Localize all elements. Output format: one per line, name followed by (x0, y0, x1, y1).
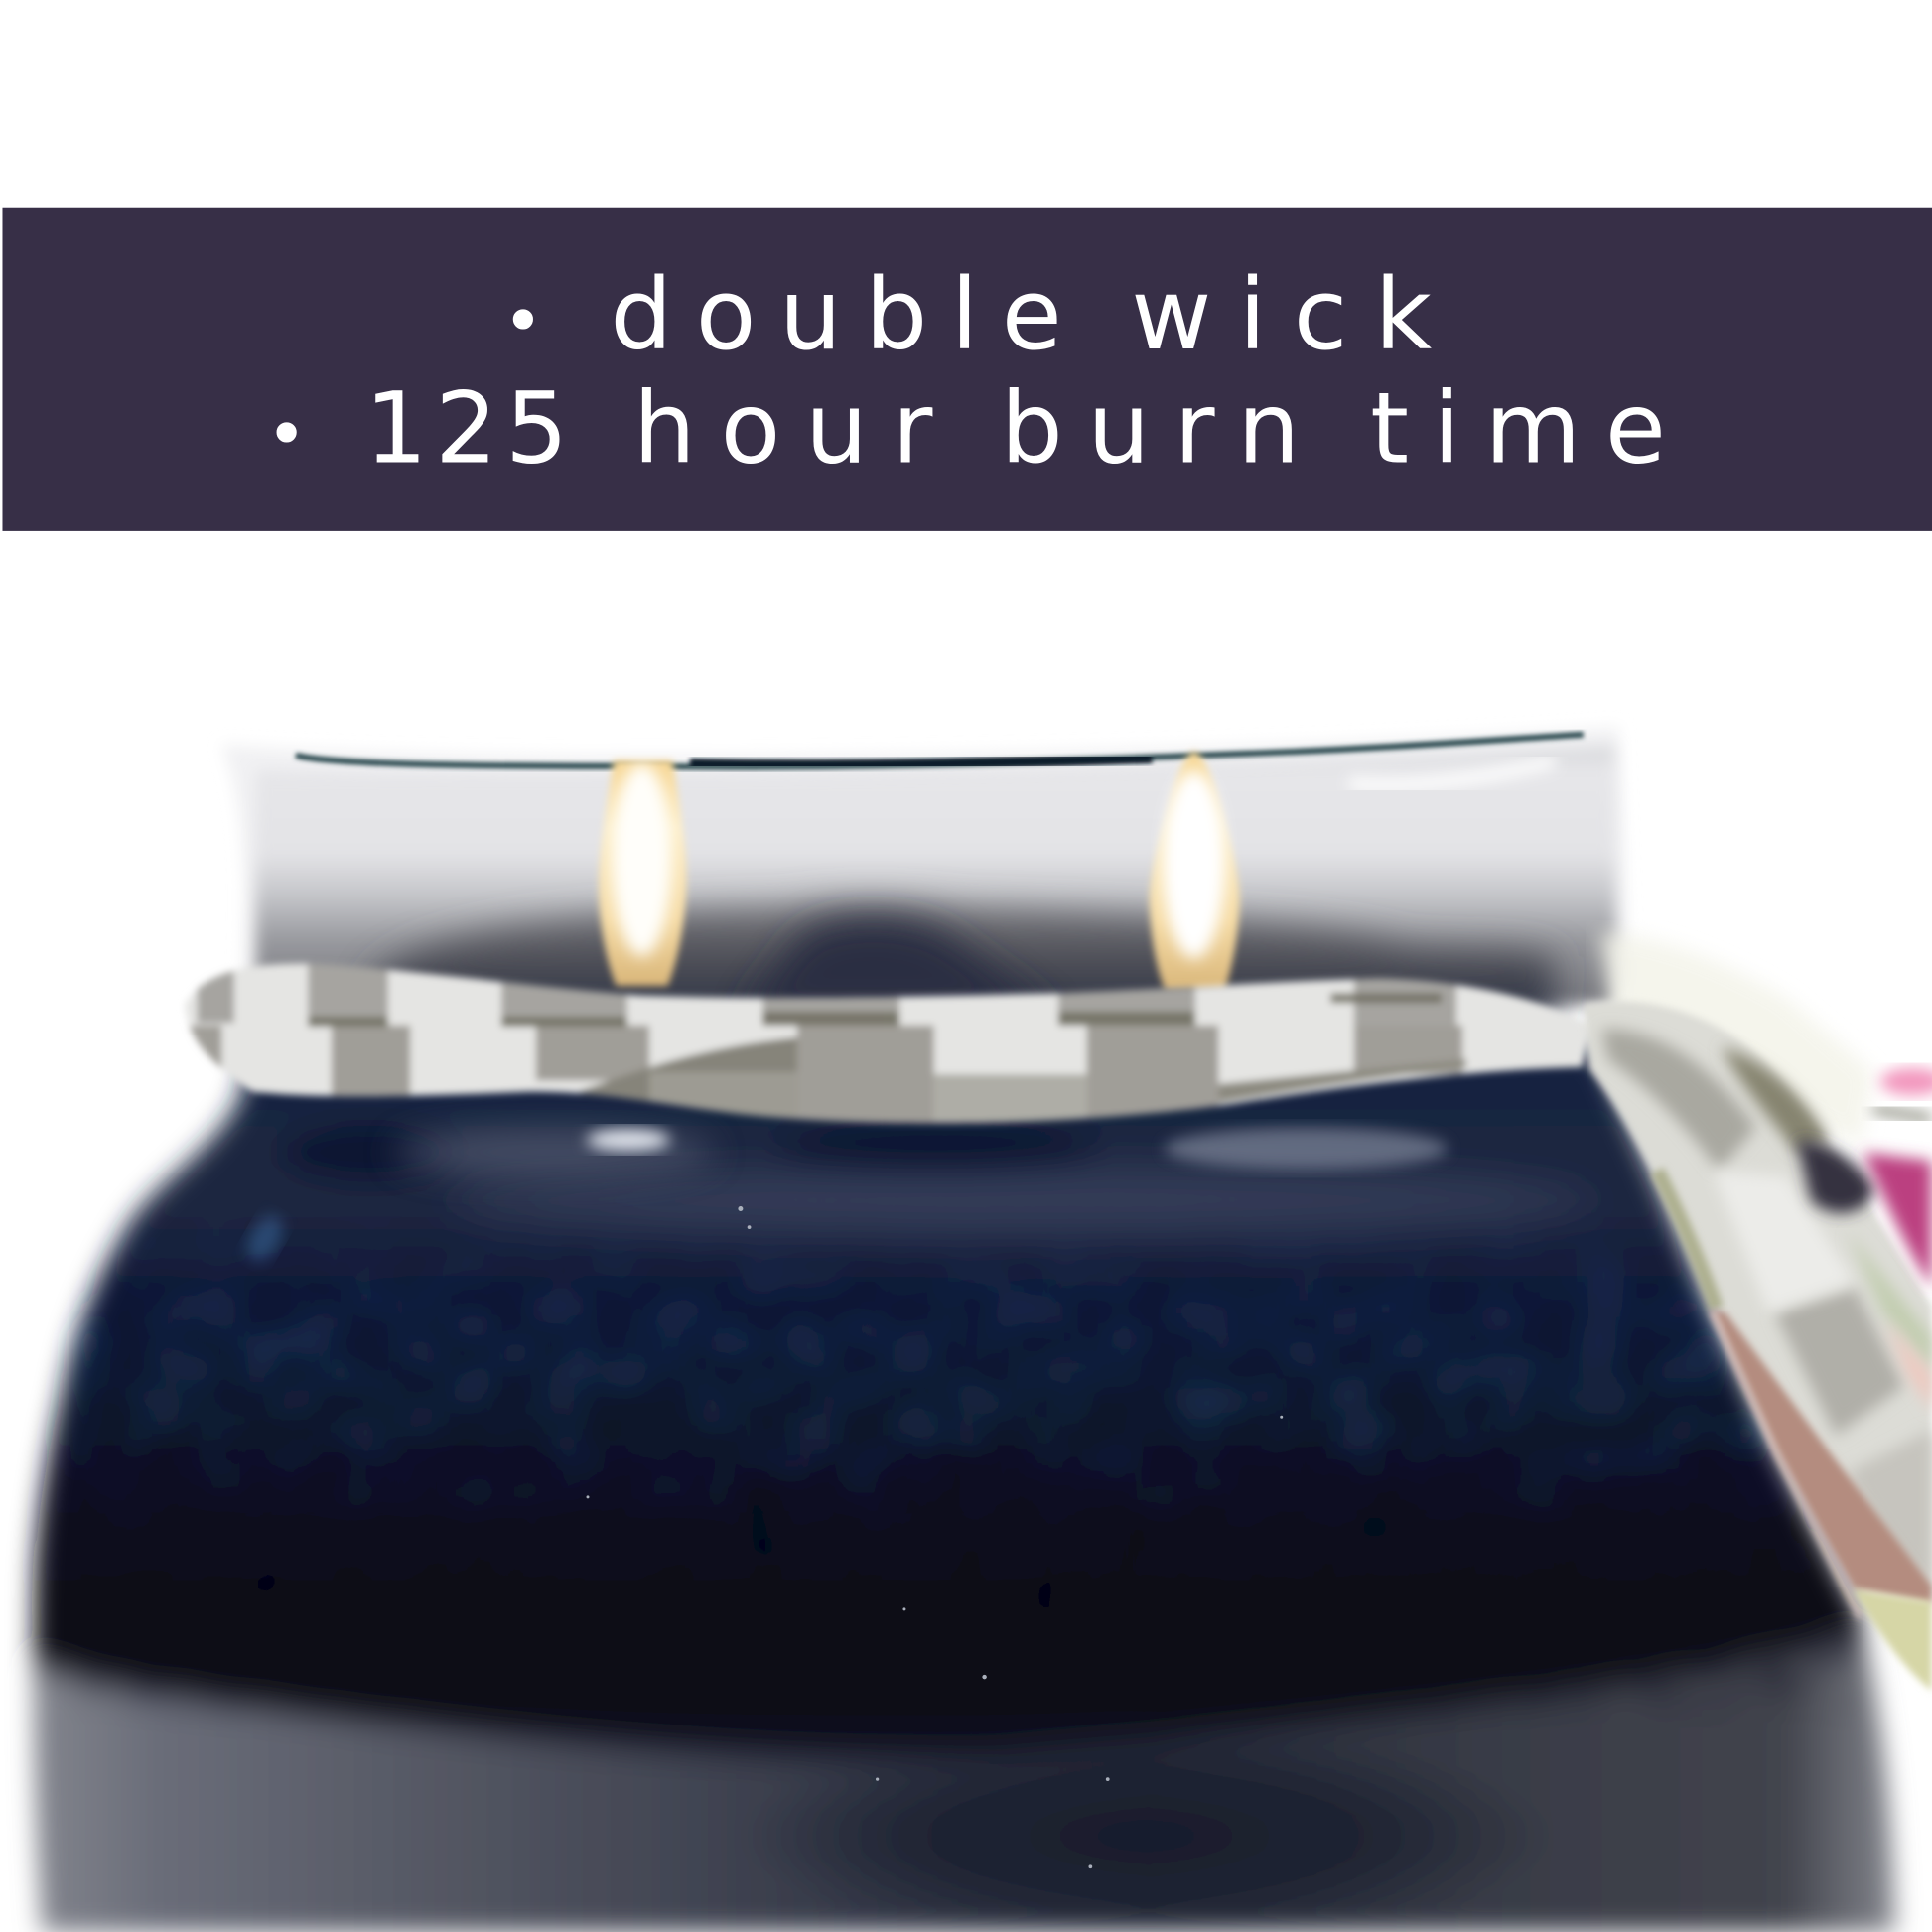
gingham ribbon around neck (184, 959, 1588, 1129)
pale tag top (1599, 931, 1872, 1146)
tail gray checks (1601, 1029, 1756, 1171)
wax mass (0, 1035, 1932, 1754)
wax seen through glass (369, 901, 1555, 1023)
tan inner lining (1712, 1311, 1932, 1604)
blue glint (240, 1209, 290, 1267)
yellow tip (1852, 1589, 1932, 1691)
feature line: double wick: • (502, 282, 543, 361)
fabric tag tail (1584, 931, 1932, 1691)
feature line: 125 hour burn time: time (1370, 371, 1666, 485)
jar neck glass (221, 727, 1629, 1023)
upper band checks (198, 955, 1456, 1026)
feature line: 125 hour burn time: • (266, 395, 307, 476)
candle jar photo (0, 727, 1932, 1932)
jar body wax (0, 1035, 1932, 1932)
flame: left (599, 760, 686, 986)
wax highlight: right (1165, 1128, 1448, 1170)
ribbon tail (1584, 1001, 1932, 1601)
feature line: double wick: wick (1131, 258, 1433, 372)
seam shadow (308, 993, 1442, 1027)
feature line: double wick: double (610, 258, 1062, 372)
dark under ribbon (776, 1124, 1097, 1169)
floral dark blot (1796, 1140, 1875, 1213)
feature line: 125 hour burn time: 125 (364, 371, 568, 485)
lower clear glass (0, 1540, 1932, 1932)
glass rim highlight (1349, 761, 1555, 785)
banner panel (2, 208, 1932, 531)
floral dark streak (1722, 1047, 1830, 1152)
feature line: 125 hour burn time: burn (1001, 371, 1300, 485)
pale green and pink strip (1849, 1232, 1932, 1374)
glass rim line (296, 735, 1584, 767)
dark mottling (73, 1392, 1861, 1725)
flame: right (1150, 751, 1240, 992)
feature line: 125 hour burn time: hour (633, 371, 933, 485)
fold shadow (578, 1034, 802, 1106)
wax specks (587, 1206, 1283, 1868)
banner background (2, 208, 1932, 531)
floral pink (1863, 1152, 1932, 1288)
wax highlight: left (394, 1128, 715, 1176)
blue mottling (73, 1207, 1799, 1553)
lower band checks (185, 1026, 1462, 1136)
haze band (444, 1165, 1601, 1238)
